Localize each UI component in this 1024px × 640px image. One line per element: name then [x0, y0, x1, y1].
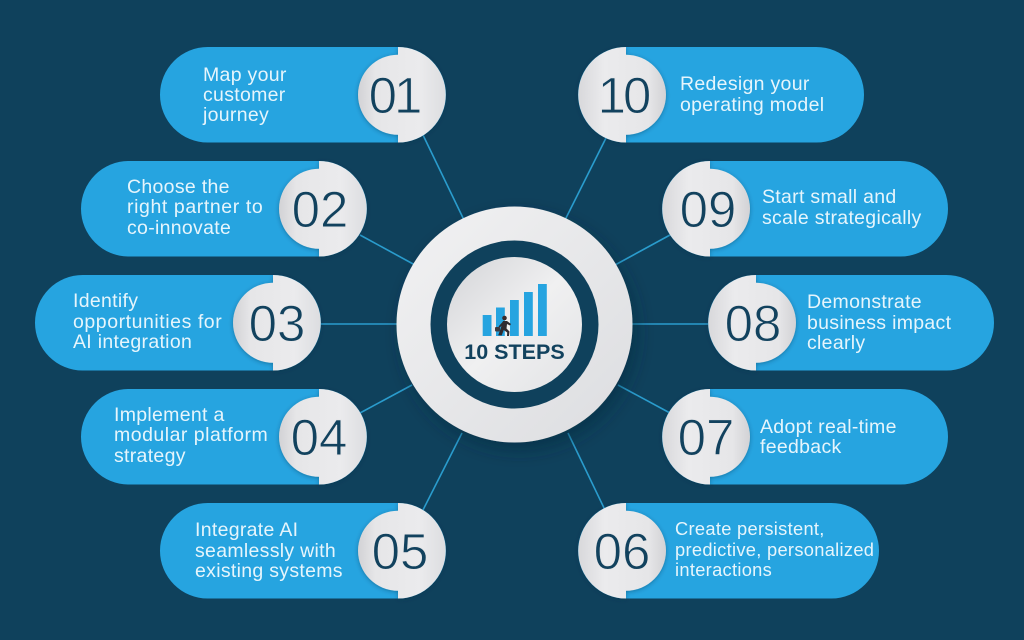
- step 05 pill: Integrate AI: [195, 519, 298, 541]
- step 05 pill: 05: [372, 523, 428, 580]
- step 01 pill: journey: [202, 104, 269, 126]
- step 05 pill: [160, 503, 446, 598]
- step 03 pill: [35, 275, 321, 370]
- step 03 pill: opportunities for: [73, 311, 222, 333]
- step 04 pill: Implement a: [114, 404, 225, 426]
- step 08 pill: business impact: [807, 312, 952, 334]
- step 07 pill: feedback: [760, 436, 842, 458]
- hub title: 10 STEPS: [464, 340, 565, 364]
- central hub: [396, 206, 632, 442]
- step 07 pill: 07: [678, 409, 734, 466]
- step 03 pill: 03: [249, 295, 305, 352]
- step 01 pill: Map your: [203, 64, 287, 86]
- step 06 pill: 06: [594, 523, 650, 580]
- step 08 pill: clearly: [807, 332, 865, 354]
- step 06 pill: Create persistent,: [675, 518, 825, 539]
- step 08 pill: [708, 275, 994, 370]
- step 07 pill: Adopt real-time: [760, 416, 897, 438]
- step 05 pill: seamlessly with: [195, 540, 336, 562]
- step 10 pill: [578, 47, 864, 142]
- step 09 pill: scale strategically: [762, 207, 922, 229]
- step 03 pill: Identify: [73, 290, 138, 312]
- step 10 pill: 10: [598, 67, 650, 124]
- step 08 pill: Demonstrate: [807, 291, 922, 313]
- step 06 pill: predictive, personalized: [675, 539, 874, 560]
- icon: rising bar chart: [483, 284, 547, 336]
- step 10 pill: Redesign your: [680, 73, 810, 95]
- step 02 pill: [81, 161, 367, 256]
- step 06 pill: [578, 503, 879, 598]
- step 04 pill: strategy: [114, 445, 186, 467]
- step 10 pill: operating model: [680, 94, 824, 116]
- step 02 pill: co-innovate: [127, 217, 231, 239]
- inner disc: [447, 257, 582, 392]
- step 09 pill: 09: [680, 181, 736, 238]
- step 02 pill: right partner to: [127, 196, 263, 218]
- step 09 pill: Start small and: [762, 186, 897, 208]
- step 06 pill: interactions: [675, 559, 772, 580]
- step 02 pill: Choose the: [127, 176, 230, 198]
- step 09 pill: [662, 161, 948, 256]
- step 04 pill: 04: [291, 409, 347, 466]
- dark ring: [430, 240, 598, 408]
- step 03 pill: AI integration: [73, 331, 192, 353]
- step 05 pill: existing systems: [195, 560, 343, 582]
- step 08 pill: 08: [725, 295, 781, 352]
- step 01 pill: [160, 47, 446, 142]
- step 01 pill: 01: [369, 67, 420, 124]
- step 01 pill: customer: [203, 84, 286, 106]
- icon: running businessman: [495, 316, 511, 336]
- step 04 pill: modular platform: [114, 424, 268, 446]
- step 07 pill: [662, 389, 948, 484]
- step 04 pill: [81, 389, 367, 484]
- step 02 pill: 02: [292, 181, 348, 238]
- outer ring: [396, 206, 632, 442]
- connector lines: [315, 135, 712, 510]
